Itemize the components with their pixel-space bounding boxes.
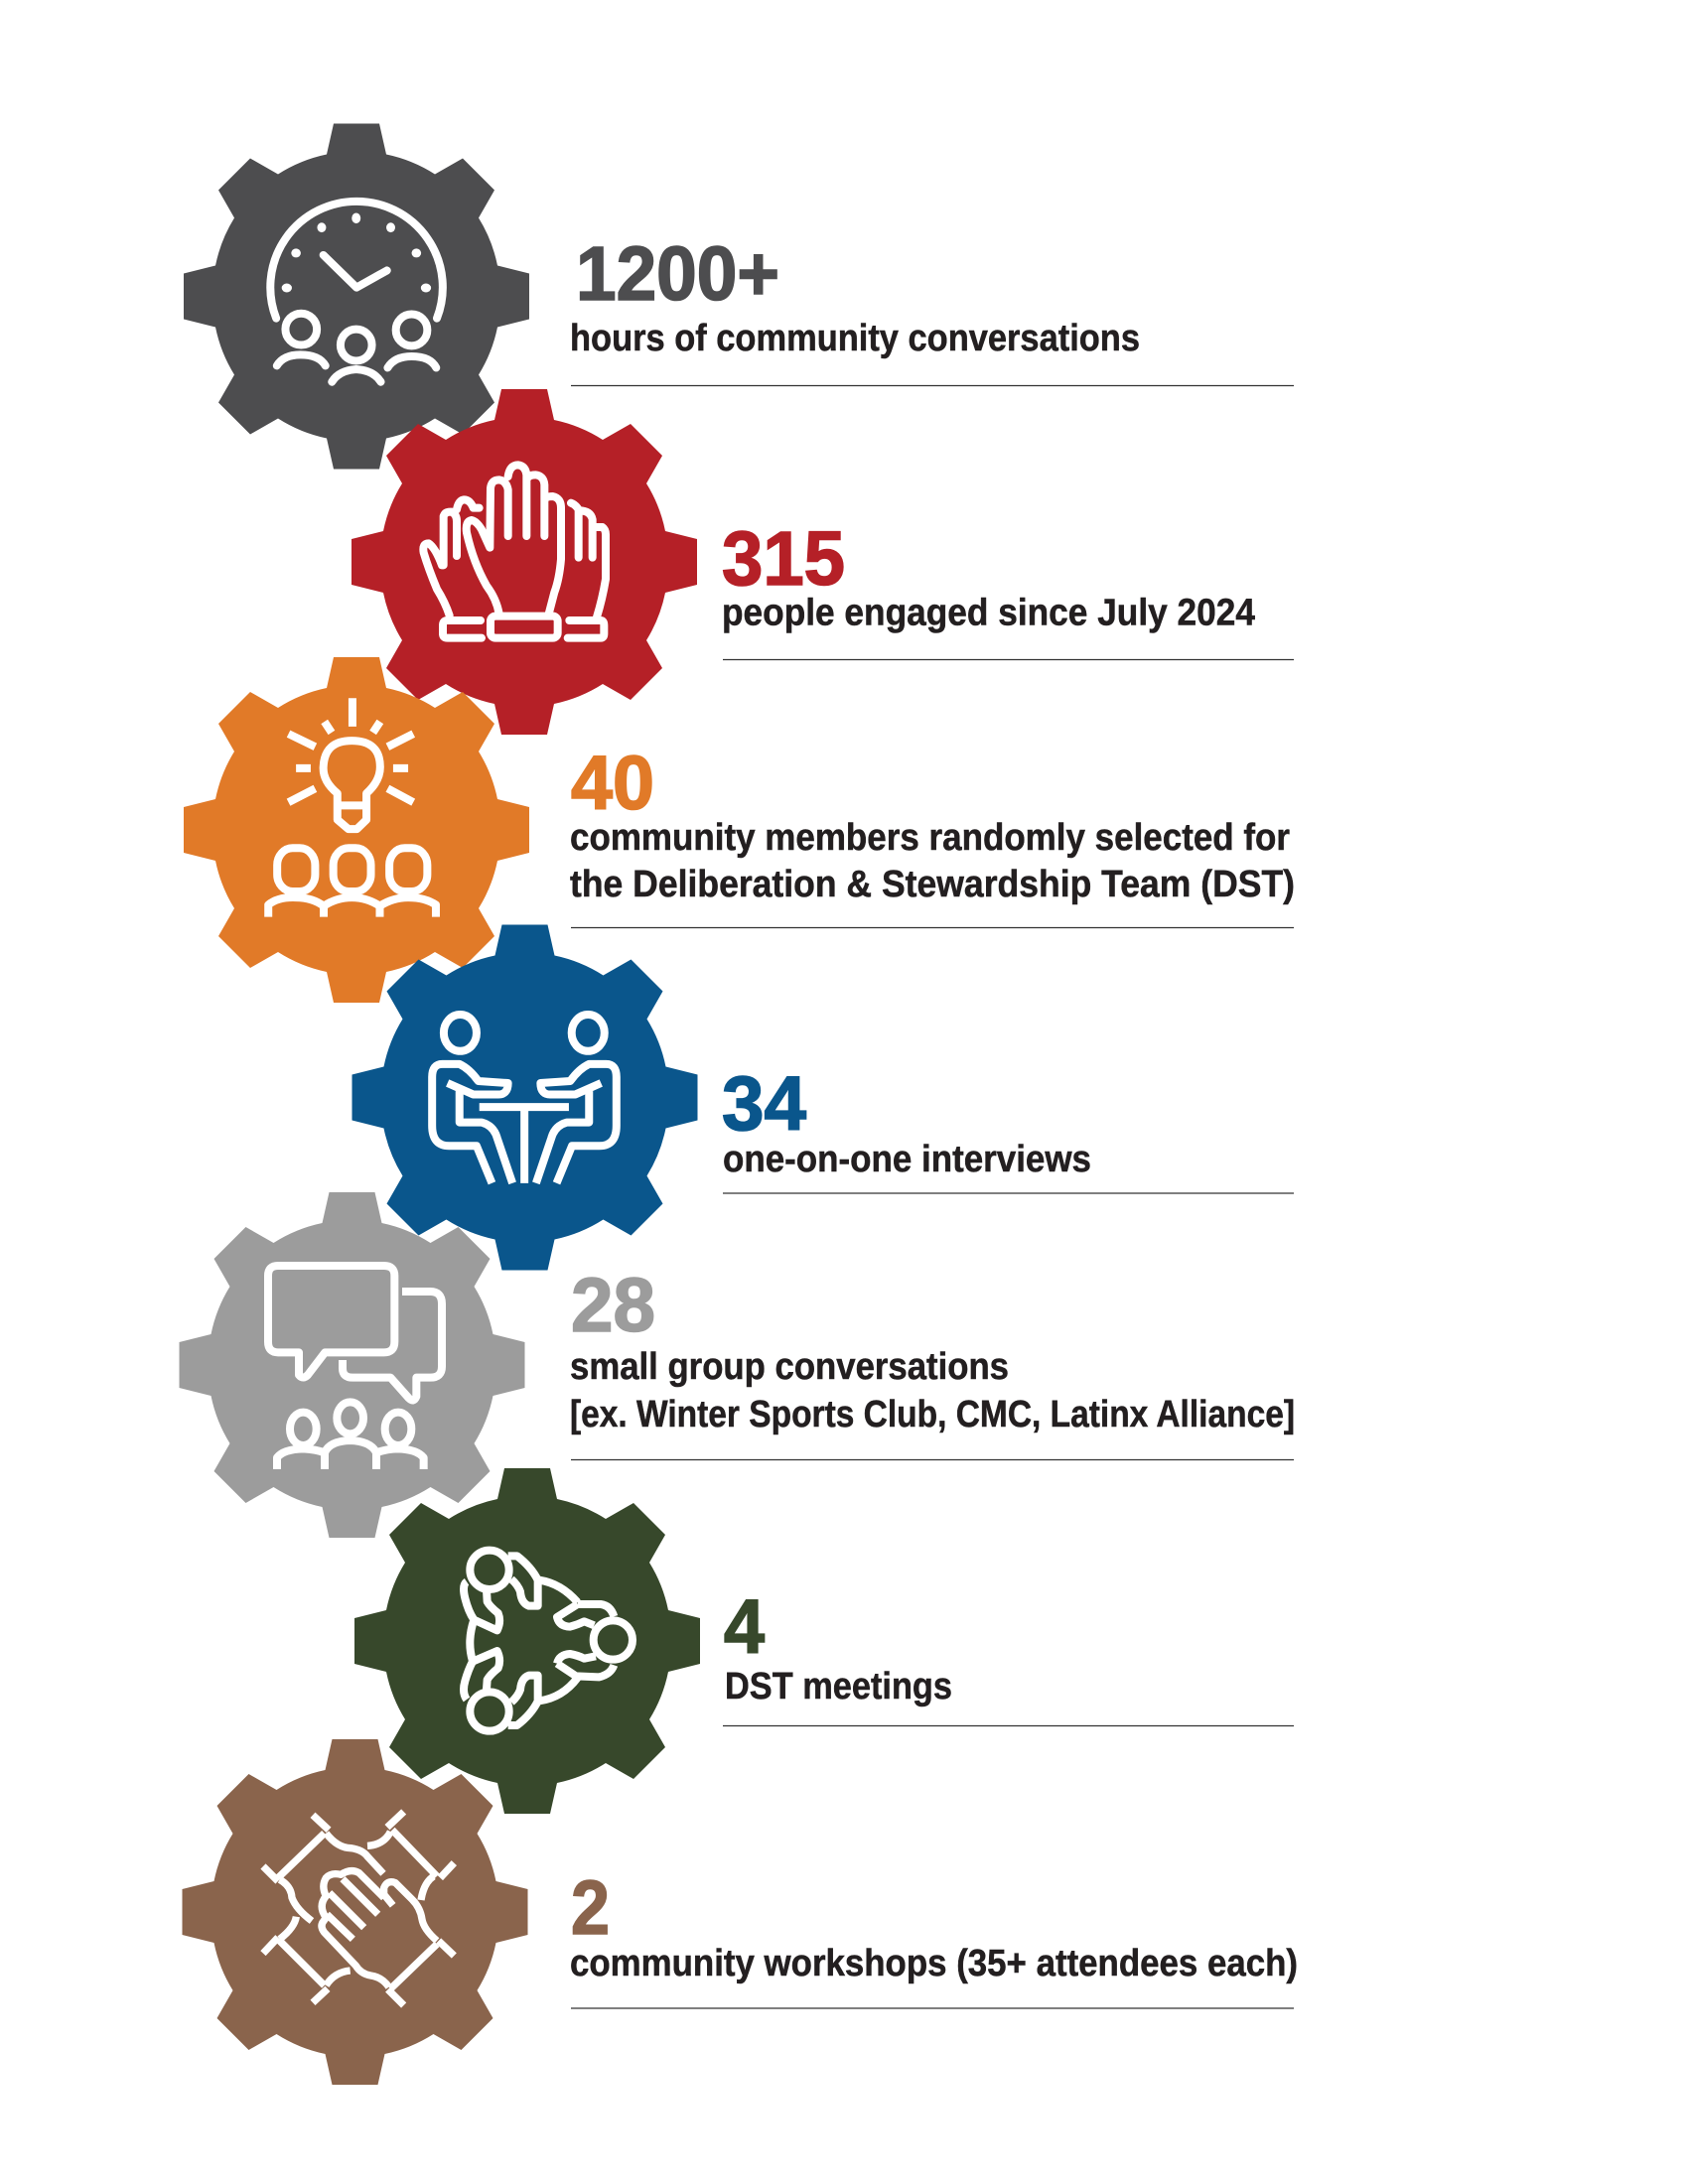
- stat: 1200+ hours of community conversations: 1200+: [576, 231, 779, 317]
- gear 7: community workshops: [183, 1739, 528, 2085]
- icon: speech bubbles above three people: [268, 1266, 442, 1469]
- gear 4: one-on-one interviews: [352, 925, 697, 1271]
- stat: 315 people engaged: 315: [722, 516, 845, 602]
- stat: 1200+ hours of community conversations: hours of community conversations: [570, 318, 1140, 359]
- stat: 315 people engaged: [722, 516, 1294, 659]
- gear shape: light grey: [179, 1192, 524, 1538]
- stat: 4 DST meetings: DST meetings: [725, 1666, 952, 1707]
- icon: clock above three people: [270, 202, 443, 382]
- stat: 40 community members: the Deliberation & Stewardship Team (DST): [570, 864, 1295, 905]
- gear shape: dark green: [354, 1468, 700, 1814]
- gear 3: community members selected: [184, 657, 529, 1003]
- stat: 34 one-on-one interviews: 34: [722, 1061, 806, 1147]
- stat: 315 people engaged: people engaged since July 2024: [722, 592, 1255, 633]
- stat: 40 community members: community members randomly selected for: [570, 817, 1290, 859]
- gear 6: DST meetings: [354, 1468, 700, 1814]
- gear 5: small group conversations: [179, 1192, 524, 1538]
- stat: 34 one-on-one interviews: [722, 1061, 1294, 1193]
- stat: 40 community members: 40: [571, 741, 654, 826]
- icon: light bulb above three people: [268, 698, 436, 917]
- icon: four hands joined: [263, 1812, 454, 2005]
- stat: 2 community workshops: [570, 1865, 1298, 2008]
- gear 2: people engaged: [352, 389, 697, 735]
- stat: 40 community members: [570, 741, 1295, 927]
- gear shape: brown: [183, 1739, 528, 2085]
- stat: 4 DST meetings: 4: [724, 1584, 765, 1670]
- stat: 28 small group conversations: [570, 1263, 1295, 1459]
- stat: 4 DST meetings: [723, 1584, 1294, 1725]
- stat: 2 community workshops: 2: [571, 1865, 610, 1951]
- stat: 28 small group conversations: 28: [571, 1263, 655, 1348]
- gear 1: hours of conversation: [184, 123, 529, 469]
- gear shape: red: [352, 389, 697, 735]
- gear shape: blue: [352, 925, 697, 1271]
- icon: two people at a table: [432, 1015, 617, 1183]
- icon: three raised hands: [423, 465, 606, 638]
- gear shape: orange: [184, 657, 529, 1003]
- stat: 2 community workshops: community workshops (35+ attendees each): [570, 1943, 1298, 1984]
- stat: 28 small group conversations: small group conversations: [570, 1346, 1009, 1388]
- stat: 34 one-on-one interviews: one-on-one interviews: [723, 1139, 1091, 1180]
- icon: three people in a circle, top view: [464, 1551, 633, 1731]
- gear shape: dark grey: [184, 123, 529, 469]
- stat: 28 small group conversations: [ex. Winter Sports Club, CMC, Latinx Alliance]: [570, 1394, 1295, 1435]
- stat: 1200+ hours of community conversations: [570, 231, 1294, 385]
